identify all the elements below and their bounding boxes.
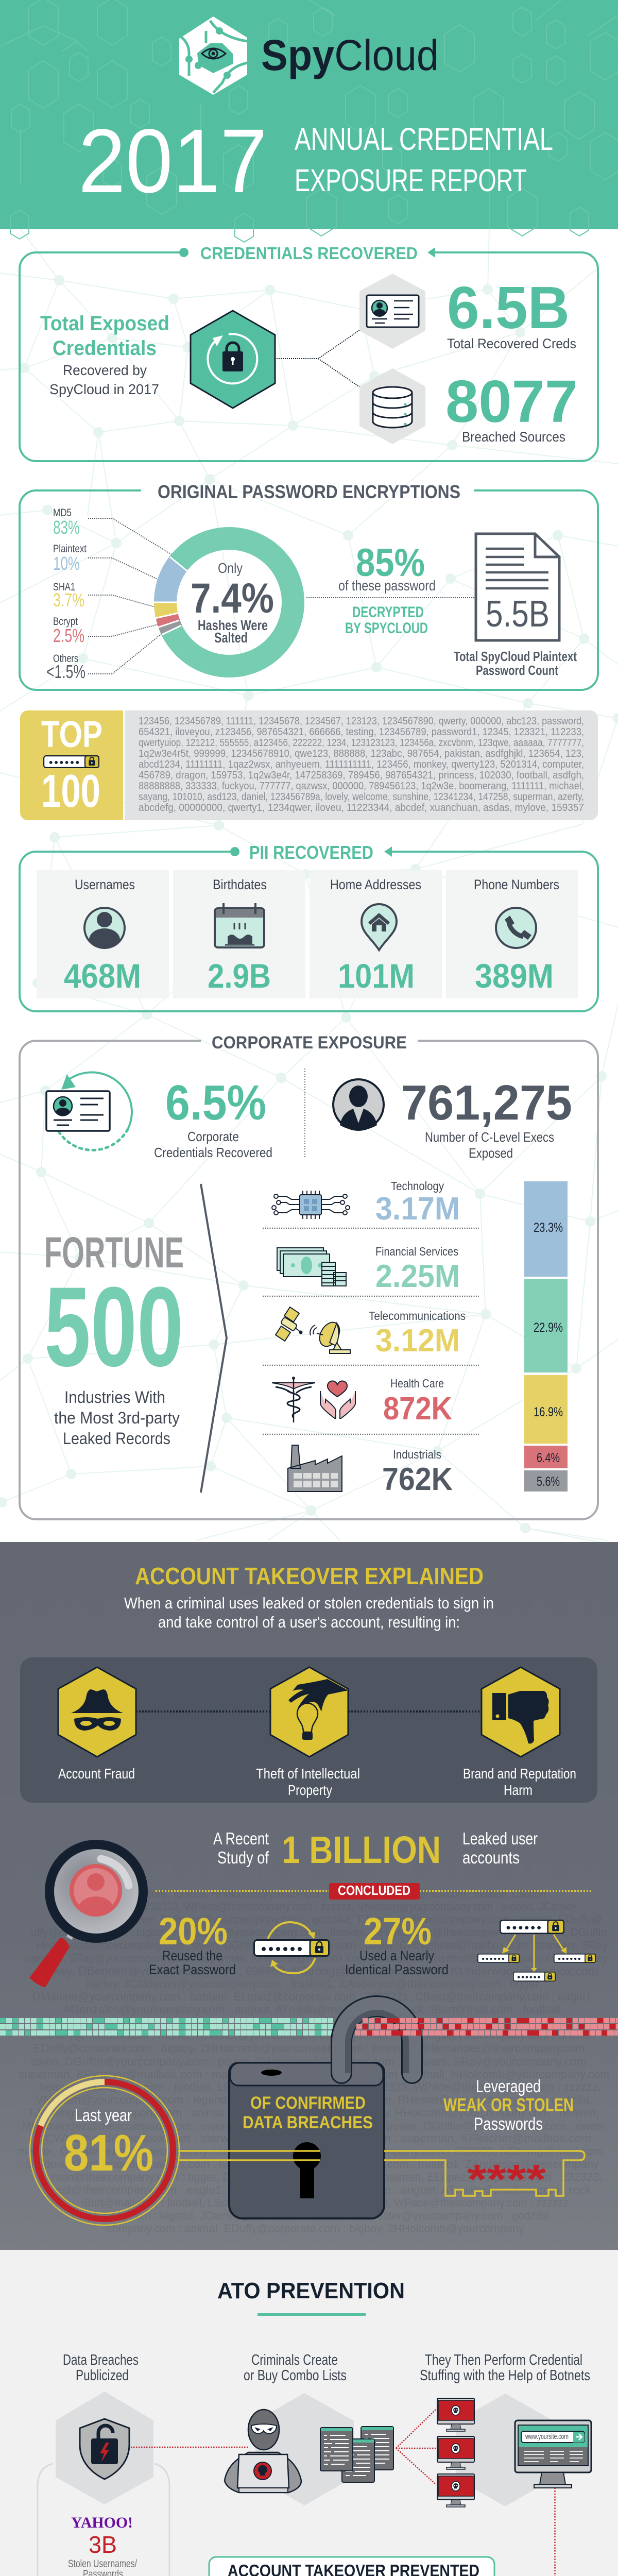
icon: executive xyxy=(333,1079,384,1130)
card: usernames: Usernames xyxy=(75,877,135,892)
section: account takeover explained xyxy=(0,1542,618,2250)
background: leaked credentials text: MHernandez@theircompany.com : owen, DGriffin@yourcompany.com : power, DGriffin@yourcompany.com : owen xyxy=(22,2120,603,2132)
graphic: key xyxy=(178,2151,585,2196)
chart: industry share bar: 22.9% xyxy=(534,1320,563,1335)
stat: 27 percent nearly identical xyxy=(345,1910,449,1977)
row: financial services: 2.25M xyxy=(375,1259,460,1294)
outline: breach list card xyxy=(38,2464,588,2576)
legend: hash types xyxy=(46,507,178,682)
row: health care: Health Care xyxy=(390,1377,444,1390)
row: health care: 872K xyxy=(383,1391,452,1427)
stat: 6.5 percent: Credentials Recovered xyxy=(154,1145,272,1160)
background: leaked credentials text: IBurt@mail.com : football, LSutton@yourcompany.com : 232323, WPace@theircompany.com : zzzzzz, xyxy=(81,2196,572,2209)
panel: top 100 badge xyxy=(20,710,123,820)
background: leaked credentials text: master, CWhitehead@theircompany.com : hockey, DBennett@yourcompany.com : 696969, NStrong@mail.com xyxy=(18,2145,603,2158)
icon: database xyxy=(359,368,425,444)
panel: top 100 passwords list xyxy=(125,710,598,820)
icon: id card xyxy=(359,274,425,349)
icon: password variations xyxy=(478,1920,595,1981)
text: donut center: Hashes Were xyxy=(198,617,268,633)
text: of confirmed data breaches: DATA BREACHES xyxy=(243,2113,373,2132)
badge: concluded: CONCLUDED xyxy=(338,1883,410,1898)
icon: botnet monitors xyxy=(437,2398,474,2507)
stat: 85 percent decrypted: 85% xyxy=(356,541,425,585)
stat: yahoo 3B xyxy=(68,2531,137,2576)
panel: top 100 passwords list: 456789, dragon, 159753, 1q2w3e4r, 147258369, 789456, 987654321, princess, 102030, football, asdfgh, xyxy=(139,770,584,781)
text: 1 billion study: Leaked user xyxy=(462,1829,538,1848)
background: leaked credentials text: superman, KFletcher@mailbox.com : master, LSutton@yourcompany.com : football, HHolcomb@yourcompany.com xyxy=(19,2068,610,2081)
legend: hash types: <1.5% xyxy=(46,661,85,682)
text: step captions: Publicized xyxy=(76,2367,129,2384)
text: donut center: Only xyxy=(218,560,243,576)
text: 1 billion study: accounts xyxy=(462,1848,520,1867)
row: telecommunications xyxy=(276,1307,466,1359)
card: home addresses: 101M xyxy=(338,957,415,995)
text: definition: When a criminal uses leaked or stolen credentials to sign in xyxy=(124,1594,494,1612)
stat: 6.5 percent: 6.5% xyxy=(165,1075,266,1130)
background: leaked credentials text: VNielsen@yourcompany.com : legend, JCarney@mailbox.com : runner, RHester@yourcompany.com : godzilla, xyxy=(36,2093,593,2106)
heading: ATO prevention xyxy=(217,2278,405,2316)
icon: document 5.5B xyxy=(476,534,559,640)
stat: 27 percent nearly identical: 27% xyxy=(364,1910,432,1953)
stat: 20 percent reused xyxy=(149,1910,236,1977)
background: leaked credentials text: harley, JCalderon@yourcompany.com : trustno1, ZAnderson@theircompany.com : tigger, xyxy=(87,1977,542,1990)
background: leaked credentials text: EDuffy@corporate.com : bigboy, 2HHolcomb@yourcompany.com : heaven, MHernandez@theircompany.com : xyxy=(33,2042,591,2055)
background: leaked credentials text xyxy=(18,1887,610,2235)
text: definition xyxy=(124,1594,494,1631)
chart: industry share bar: 16.9% xyxy=(534,1405,563,1419)
card: birthdates: Birthdates xyxy=(213,877,267,892)
icon: same password loop xyxy=(254,1922,329,1973)
title: report name xyxy=(295,122,553,198)
badge: account takeover prevented xyxy=(209,2557,494,2576)
text: of confirmed data breaches xyxy=(243,2093,373,2132)
icon: combo list documents xyxy=(320,2427,393,2482)
background: leaked credentials text: est@theircompany.com : eagle1, AGonzales@yourcompany.com : august, ATrujillo@mailbox.com : rock xyxy=(55,2183,592,2196)
stat: 761,275: 761,275 xyxy=(401,1075,572,1130)
background: leaked credentials text: any.com : football, HHolcomb@yourcompany.com : heaven, IBurt@mail.com : football, LSutton xyxy=(129,1887,546,1900)
panel: consequences xyxy=(20,1657,597,1803)
heading: credentials recovered: CREDENTIALS RECOVERED xyxy=(200,244,418,263)
card: phone numbers xyxy=(446,870,578,998)
graphic: fortune 500 wordmark: FORTUNE xyxy=(44,1228,184,1277)
icon: target site monitor: www.yoursite.com xyxy=(525,2432,569,2441)
row: financial services: Financial Services xyxy=(375,1245,458,1258)
stat: 761,275 xyxy=(401,1075,572,1161)
header band xyxy=(0,0,618,242)
row: technology xyxy=(272,1179,460,1227)
labels: consequences xyxy=(58,1766,576,1798)
stat: 20 percent reused: Exact Password xyxy=(149,1962,236,1977)
background: leaked credentials text: DMalone@yourcompany.com : batman, ELopez@corporate.com : 2323321, CBest@theircompany.com : eagle1, xyxy=(32,1990,595,2003)
background: leaked credentials text: AGonzales@yourcompany.com : august, ATrujillo@mailbox.com : rock, IBurt@mail.com : football, xyxy=(63,2003,563,2016)
card: usernames: 468M xyxy=(64,957,141,995)
stat: 761,275: Number of C-Level Execs xyxy=(425,1129,554,1145)
panel: PII recovered xyxy=(20,842,598,1011)
text: leveraged weak or stolen passwords: Leveraged xyxy=(476,2077,541,2096)
heading: PII recovered: PII RECOVERED xyxy=(249,842,373,863)
icon: rotating id card xyxy=(46,1072,132,1150)
stripe: green data band xyxy=(0,2021,333,2033)
card: usernames xyxy=(37,870,169,998)
panel: original password encryptions xyxy=(20,481,598,690)
text: leveraged weak or stolen passwords: WEAK OR STOLEN xyxy=(443,2094,574,2115)
text: 1 billion study xyxy=(213,1828,538,1871)
labels: consequences: Harm xyxy=(504,1782,533,1798)
legend: hash types: Others xyxy=(53,653,78,665)
text: definition: and take control of a user's account, resulting in: xyxy=(158,1613,460,1631)
background: leaked credentials text: company.com : animal, EDuffy@corporate.com : bigboy, 2HHolcomb@yourcompany xyxy=(107,2222,524,2235)
text: total exposed credentials: SpyCloud in 2017 xyxy=(49,381,159,397)
chart: 81 percent ring: Last year xyxy=(75,2106,132,2125)
text: donut center xyxy=(191,560,274,646)
panel: corporate exposure xyxy=(20,1033,598,1519)
panel: top 100 badge: 100 xyxy=(41,766,100,817)
list: publicized breaches xyxy=(55,2514,152,2576)
chart: encryption donut xyxy=(153,538,293,666)
text: total plaintext count: Total SpyCloud Plaintext xyxy=(454,649,577,664)
graphic: fortune 500 wordmark: the Most 3rd-party xyxy=(54,1409,180,1427)
card: home addresses xyxy=(310,870,442,998)
row: industrials xyxy=(288,1445,453,1497)
legend: hash types: MD5 xyxy=(53,507,72,519)
background: leaked credentials text: TJennings@yourcompany.com : animal, EDuffy@corporate.com : bigboy, HHolcomb@yourcompany.com : heaven, xyxy=(28,2106,599,2119)
background: leaked credentials text: ail.com : runner, RHester@yourcompany.com : godzilla, TJennings@yourcompany.com : animal, EDuffy@ xyxy=(77,1913,603,1926)
text: total plaintext count xyxy=(454,649,577,678)
chart: industry share bar: 5.6% xyxy=(537,1475,560,1489)
connector: donut to document xyxy=(306,597,475,598)
background: leaked credentials text: rson@theircompany.com : tigger, DMalone@yourcompany.com : batman, ELopez@corporate.com : 232323, xyxy=(52,2171,603,2183)
stat: 85 percent decrypted: of these password xyxy=(338,578,436,594)
background: network pattern xyxy=(0,229,618,1546)
icon: thumbs down xyxy=(482,1667,560,1757)
panel: top 100 badge: TOP xyxy=(41,714,102,755)
title: report name: EXPOSURE REPORT xyxy=(295,163,527,198)
background: leaked credentials text: : heaven, IBurt@mail.com : football, LSutton@yourcompany.com : 232323, WPace@theircompany.com : zzzzzz, xyxy=(33,2080,601,2093)
icon: password field xyxy=(44,756,99,768)
stat: 761,275: Exposed xyxy=(469,1145,513,1161)
legend: hash types: Bcrypt xyxy=(53,616,78,628)
text: of confirmed data breaches: OF CONFIRMED xyxy=(250,2093,366,2113)
icon: account fraud xyxy=(58,1667,136,1757)
text: step captions: Criminals Create xyxy=(251,2352,338,2368)
stat: 6.5B: 6.5B xyxy=(447,274,570,341)
text: leveraged weak or stolen passwords xyxy=(443,2077,574,2134)
row: telecommunications: 3.12M xyxy=(375,1323,460,1359)
card: phone numbers: 389M xyxy=(475,957,554,995)
card: home addresses: Home Addresses xyxy=(330,877,421,892)
stat: 20 percent reused: 20% xyxy=(159,1910,228,1953)
text: step captions xyxy=(63,2352,590,2384)
row: technology: 3.17M xyxy=(375,1191,460,1227)
icon: target site monitor xyxy=(456,2394,591,2506)
stat: 20 percent reused: Reused the xyxy=(162,1948,222,1963)
heading: original password encryptions: ORIGINAL PASSWORD ENCRYPTIONS xyxy=(158,481,460,502)
stat: 27 percent nearly identical: Identical Password xyxy=(345,1962,449,1977)
legend: hash types: 3.7% xyxy=(53,589,84,611)
background: leaked credentials text: : shadow, KUnderwood@mailbox.com : harley, JCalderon@yourcompany.com : trustno1, ZAnderson@theircompany xyxy=(20,2158,599,2171)
labels: consequences: Account Fraud xyxy=(58,1766,135,1782)
panel: top 100 passwords list: 654321, iloveyou, z123456, 987654321, 666666, testing, 123456789, password1, 12345, 123321, 112233, xyxy=(139,726,584,738)
row: health care xyxy=(272,1377,452,1427)
heading: account takeover explained: ACCOUNT TAKEOVER EXPLAINED xyxy=(135,1563,484,1589)
labels: consequences: Theft of Intellectual xyxy=(256,1766,360,1782)
labels: consequences: Property xyxy=(288,1782,332,1798)
connector: dotted lines xyxy=(277,330,359,387)
icon: asterisk password: **** xyxy=(467,2156,546,2202)
icon: hacker xyxy=(225,2393,354,2505)
text: total exposed credentials: Recovered by xyxy=(63,362,147,378)
background: leaked credentials text: company.com : legend, JCarney@mailbox.com : runner, RHester@yourcompany.com : godzilla xyxy=(82,2209,550,2222)
heading: ATO prevention: ATO PREVENTION xyxy=(217,2278,405,2303)
icon: lock hexagon xyxy=(191,311,275,408)
stat: 85 percent decrypted: DECRYPTED xyxy=(352,604,424,621)
text: donut center: 7.4% xyxy=(191,575,274,622)
panel: top 100 passwords list: abcd1234, 11111111, 1qaz2wsx, anhyeuem, 1111111111, 123456, monkey, qwerty123, 5201314, computer, xyxy=(139,759,584,770)
chart: industry share bar: 6.4% xyxy=(537,1451,560,1465)
stat: 8077: Breached Sources xyxy=(462,429,565,445)
row: financial services xyxy=(277,1245,460,1294)
text: total plaintext count: Password Count xyxy=(476,663,558,678)
icon: shield unlocked xyxy=(56,2392,153,2504)
card: phone numbers: Phone Numbers xyxy=(474,877,559,892)
graphic: fortune 500 wordmark: Industries With xyxy=(64,1388,165,1406)
icon: padlock xyxy=(229,2006,412,2218)
stat: 27 percent nearly identical: Used a Nearly xyxy=(359,1948,434,1963)
legend: hash types: SHA1 xyxy=(53,581,75,593)
stat: 85 percent decrypted xyxy=(338,541,436,637)
logo wordmark: SpyCloud xyxy=(261,31,439,79)
panel: top 100 passwords list: 88888888, 333333, fuckyou, 777777, qazwsx, 000000, 789456123, 1q2w3e, boomerang, 1111111, michael, xyxy=(139,781,584,792)
stat: 6.5B: Total Recovered Creds xyxy=(447,336,576,351)
chart: industry share bar: 23.3% xyxy=(534,1221,563,1235)
stat: 6.5 percent xyxy=(154,1075,272,1160)
text: step captions: or Buy Combo Lists xyxy=(244,2367,347,2384)
panel: top 100 passwords list: 1q2w3e4r5t, 999999, 12345678910, qwe123, 888888, 123abc, 987654, pakistan, asdfghjkl, 123654, 123, xyxy=(139,748,584,759)
background: leaked credentials text: owen, DGriffin@yourcompany.com : power, CWhitehead@mailbox.com : starwars, SRay@yourcompany.com : xyxy=(31,2055,593,2068)
legend: hash types: 83% xyxy=(53,517,80,538)
connector: botnet dotted lines xyxy=(396,2410,512,2484)
icon: document 5.5B: 5.5B xyxy=(486,594,550,635)
stripe: red data band xyxy=(355,2021,618,2033)
text: leveraged weak or stolen passwords: Passwords xyxy=(474,2114,543,2134)
text: 1 billion study: 1 BILLION xyxy=(282,1828,441,1871)
stat: yahoo 3B: Stolen Usernames/ xyxy=(68,2558,137,2570)
text: total exposed credentials xyxy=(40,312,169,397)
background: leaked credentials text: key, DBennett@yourcompany.com : 696969, NStrong@mail.com : shadow, KUnderwood@mailbox.com xyxy=(54,1964,598,1977)
logo: SpyCloud cube xyxy=(179,16,247,95)
text: total exposed credentials: Total Exposed xyxy=(40,312,169,335)
text: 1 billion study: A Recent xyxy=(213,1829,269,1848)
section: ATO prevention xyxy=(0,2250,618,2576)
heading: corporate exposure: CORPORATE EXPOSURE xyxy=(212,1033,407,1053)
title: year: 2017 xyxy=(78,111,267,212)
legend: hash types: 2.5% xyxy=(53,625,84,646)
legend: hash types: Plaintext xyxy=(53,543,87,555)
row: industrials: Industrials xyxy=(393,1448,441,1461)
text: 1 billion study: Study of xyxy=(217,1848,269,1867)
row: telecommunications: Telecommunications xyxy=(369,1309,466,1323)
text: step captions: Data Breaches xyxy=(63,2352,139,2368)
icon: stolen idea xyxy=(270,1667,348,1757)
text: total exposed credentials: Credentials xyxy=(53,337,157,360)
chart: industry share bar xyxy=(524,1181,568,1492)
stat: yahoo 3B: 3B xyxy=(89,2531,117,2558)
stat: 85 percent decrypted: BY SPYCLOUD xyxy=(345,620,428,637)
panel: top 100 passwords list: abcdefg, 00000000, qwerty1, 1234qwer, iloveu, 11223344, abcdef, xuanchuan, asdas, mylove, 159357 xyxy=(139,802,584,814)
graphic: fortune 500 wordmark xyxy=(44,1228,184,1448)
background: leaked credentials text: CWhitehead@mailbox.com : starwars, SRay@yourcompany.com : superman, KFletcher@mailbox.com xyxy=(45,2132,591,2145)
card: birthdates: 2.9B xyxy=(208,957,271,995)
stat: 8077: 8077 xyxy=(445,368,578,435)
logo: yahoo: YAHOO! xyxy=(71,2514,133,2531)
graphic: fortune 500 wordmark: Leaked Records xyxy=(63,1429,170,1448)
text: donut center: Salted xyxy=(214,630,248,646)
graphic: fortune 500 wordmark: 500 xyxy=(44,1263,183,1390)
labels: consequences: Brand and Reputation xyxy=(463,1766,576,1782)
chart: 81 percent ring: 81% xyxy=(64,2124,153,2182)
background: leaked credentials text: ny.com : 232323, WPace@theircompany.com : zzzzzz, VNielsen@yourcompany.com : legend, JCarney xyxy=(103,1900,577,1913)
background: leaked credentials text: JCarney@mailbox.com : runner, RHester@yourcompany.com : godzilla, TJennings@yourcompany.com : animal, xyxy=(32,2029,595,2042)
chart: 81 percent ring xyxy=(30,2076,179,2225)
panel: credentials recovered xyxy=(20,244,598,461)
row: technology: Technology xyxy=(391,1179,444,1193)
row: industrials: 762K xyxy=(382,1462,453,1497)
icon: magnifying glass xyxy=(29,1844,143,1987)
stat: 6.5 percent: Corporate xyxy=(187,1129,239,1144)
legend: hash types: 10% xyxy=(53,553,80,574)
card: birthdates xyxy=(173,870,305,998)
